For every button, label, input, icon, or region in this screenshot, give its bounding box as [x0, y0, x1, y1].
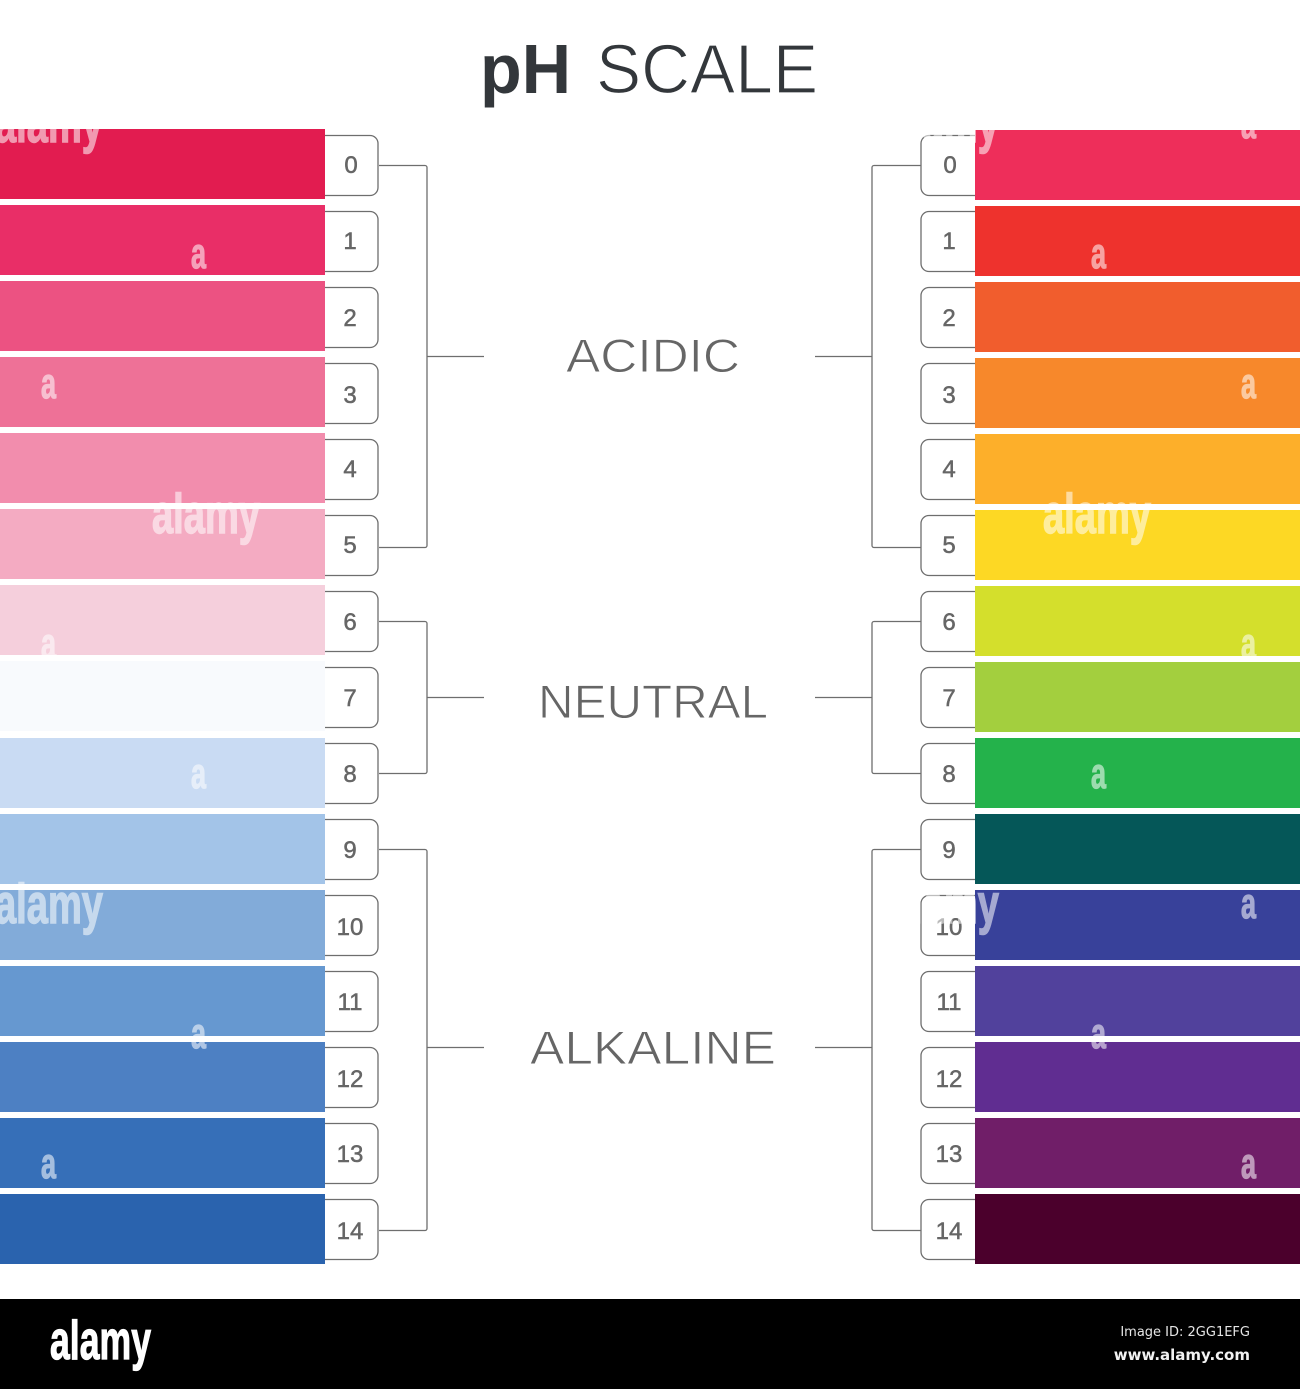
- watermarks: a: [1241, 880, 1257, 928]
- right number badges: 13: [936, 1141, 962, 1168]
- right number badges: 6: [942, 609, 956, 636]
- right number badges: 3: [942, 382, 956, 409]
- watermarks: a: [41, 1140, 57, 1188]
- left number badges: 9: [343, 837, 357, 864]
- watermarks: a: [191, 1010, 207, 1058]
- right number badges: 12: [936, 1066, 962, 1093]
- right number badges: [921, 136, 975, 1260]
- watermarks: a: [41, 360, 57, 408]
- watermarks: a: [41, 620, 57, 668]
- left number badges: 11: [338, 989, 362, 1016]
- left number badges: 14: [337, 1218, 363, 1245]
- label: alkaline: ALKALINE: [530, 1021, 776, 1074]
- left number badges: [325, 136, 378, 1260]
- watermarks: a: [1091, 1010, 1107, 1058]
- right number badges: 4: [942, 456, 956, 483]
- right number badges: 9: [942, 837, 956, 864]
- right number badges: 7: [942, 685, 956, 712]
- footer logo: alamy: [50, 1309, 151, 1371]
- watermarks: a: [191, 230, 207, 278]
- right brackets: [815, 166, 921, 1230]
- watermarks: alamy: [891, 91, 999, 154]
- left brackets: [379, 166, 484, 1230]
- title: pH: [480, 30, 571, 108]
- left number badges: 1: [343, 228, 357, 255]
- left number badges: 12: [337, 1066, 363, 1093]
- left number badges: 10: [337, 914, 363, 941]
- panel: left pink-to-blue scale bars: [0, 129, 325, 1264]
- right number badges: 5: [942, 532, 956, 559]
- image id: Image ID: 2GG1EFG: [1120, 1325, 1250, 1340]
- title: [480, 30, 818, 108]
- watermarks: a: [1241, 100, 1257, 148]
- left number badges: 5: [343, 532, 357, 559]
- left number badges: 6: [343, 609, 357, 636]
- left number badges: 2: [343, 305, 357, 332]
- label: neutral: NEUTRAL: [538, 675, 768, 728]
- footer bar: [0, 1299, 1300, 1389]
- right number badges: 14: [936, 1218, 962, 1245]
- panel: right rainbow scale bars: [975, 130, 1300, 1264]
- left number badges: 13: [337, 1141, 363, 1168]
- website: www.alamy.com: [1114, 1346, 1250, 1364]
- watermarks: a: [191, 750, 207, 798]
- watermarks: a: [1241, 360, 1257, 408]
- right number badges: 8: [942, 761, 956, 788]
- right number badges: 0: [943, 152, 957, 179]
- left number badges: 3: [343, 382, 357, 409]
- right number badges: 11: [937, 989, 961, 1016]
- left number badges: 4: [343, 456, 357, 483]
- left number badges: 8: [343, 761, 357, 788]
- watermarks: alamy: [1043, 482, 1151, 545]
- watermarks: alamy: [891, 872, 999, 935]
- left number badges: 0: [344, 152, 358, 179]
- watermarks: alamy: [152, 482, 260, 545]
- watermarks: a: [1091, 230, 1107, 278]
- left number badges: 7: [343, 685, 357, 712]
- watermarks: [0, 91, 1257, 1188]
- right number badges: 10: [936, 914, 962, 941]
- watermarks: a: [1091, 750, 1107, 798]
- watermarks: a: [1241, 1140, 1257, 1188]
- label: acidic: ACIDIC: [566, 329, 740, 382]
- watermarks: a: [1241, 620, 1257, 668]
- title: SCALE: [596, 30, 818, 108]
- right number badges: 2: [942, 305, 956, 332]
- right number badges: 1: [942, 228, 956, 255]
